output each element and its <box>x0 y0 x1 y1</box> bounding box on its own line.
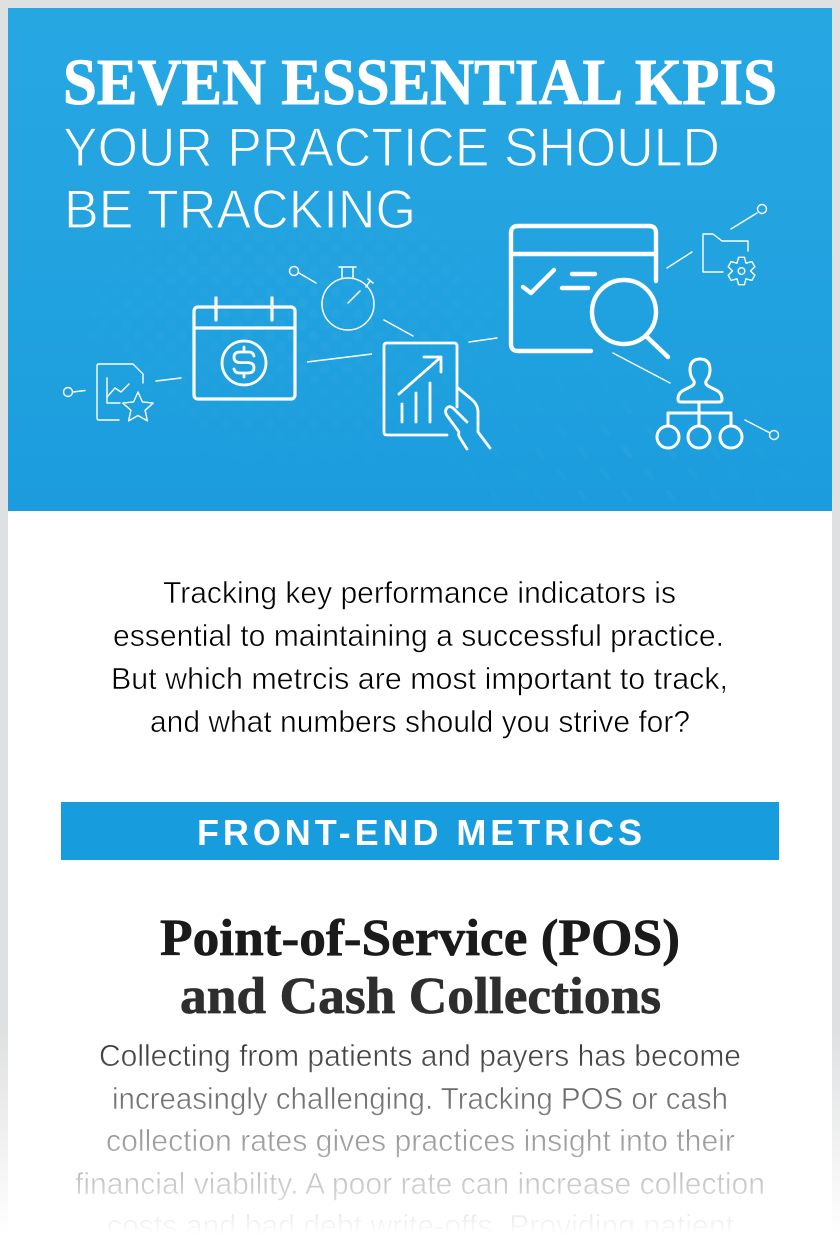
icon: document with chart and star <box>64 364 181 421</box>
icon: person with org chart <box>613 353 778 448</box>
KPI heading: and Cash Collections <box>180 968 661 1025</box>
intro text: essential to maintaining a successful practice. <box>113 618 724 653</box>
title: BE TRACKING <box>64 178 416 240</box>
KPI description text: Collecting from patients and payers has become <box>99 1038 741 1073</box>
section banner: front-end metrics <box>61 802 779 860</box>
title: SEVEN ESSENTIAL KPIS <box>63 46 777 119</box>
header panel <box>8 8 832 511</box>
KPI heading <box>160 910 680 1025</box>
KPI description text: financial viability. A poor rate can increase collection <box>75 1166 765 1201</box>
icon: tablet with growth chart and hand <box>384 338 497 449</box>
icon: calendar with dollar <box>194 298 295 399</box>
intro text <box>111 575 728 739</box>
icon: folder with gear <box>667 204 766 285</box>
icon: window with checklist and magnifier <box>511 226 668 357</box>
intro text: But which metrcis are most important to track, <box>111 661 728 696</box>
title: YOUR PRACTICE SHOULD <box>63 116 720 178</box>
intro text: and what numbers should you strive for? <box>150 704 690 739</box>
KPI description text <box>75 1038 765 1243</box>
connector line <box>307 354 372 362</box>
KPI description text: costs and bad debt write-offs. Providing patient <box>107 1208 734 1243</box>
section banner: front-end metrics: FRONT-END METRICS <box>197 812 642 853</box>
KPI description text: collection rates gives practices insight into their <box>106 1123 735 1158</box>
KPI description text: increasingly challenging. Tracking POS or cash <box>112 1081 728 1116</box>
icon: stopwatch <box>290 266 413 336</box>
KPI heading: Point-of-Service (POS) <box>160 910 680 967</box>
title <box>63 46 777 240</box>
intro text: Tracking key performance indicators is <box>163 575 676 610</box>
